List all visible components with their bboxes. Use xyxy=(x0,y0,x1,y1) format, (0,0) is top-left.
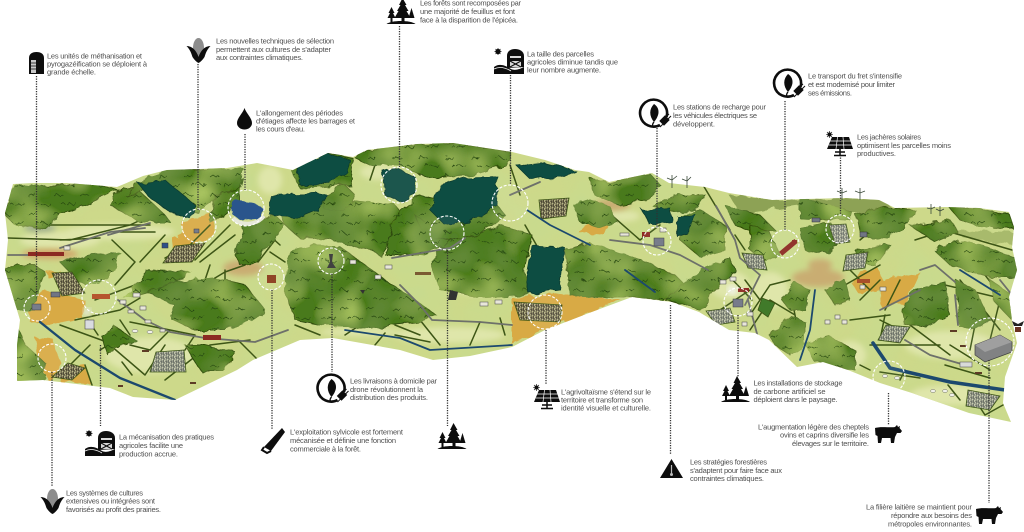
hedgerow network xyxy=(8,158,1012,415)
callout: mécanisation xyxy=(85,345,214,458)
text: Les stations de recharge pour xyxy=(673,102,766,112)
text: Les unités de méthanisation et xyxy=(47,52,143,60)
text: de carbone artificiel se xyxy=(754,387,826,396)
text: extensives ou intégrées sont xyxy=(66,496,156,506)
text: grande échelle. xyxy=(47,68,96,76)
callout: fret xyxy=(774,70,902,230)
text: Les livraisons à domicile par xyxy=(350,376,438,386)
text: identité visuelle et culturelle. xyxy=(561,404,651,412)
callout: sylviculture xyxy=(262,290,404,454)
text xyxy=(350,376,438,402)
rivers xyxy=(40,210,1005,400)
text xyxy=(256,108,356,134)
text: agricoles diminue tandis que xyxy=(527,58,618,66)
text: production accrue. xyxy=(119,450,178,458)
callout: drones xyxy=(318,274,438,402)
callout: cheptels xyxy=(758,393,902,448)
text: une majorité de feuillus et font xyxy=(420,7,516,16)
icon: leaf plug xyxy=(774,70,805,97)
tan parcels xyxy=(24,214,920,385)
callout: méthanisation xyxy=(29,52,148,295)
olive distant hills xyxy=(729,195,1014,245)
text: Le transport du fret s'intensifie xyxy=(808,72,902,80)
text: favorisés au profit des prairies. xyxy=(66,505,161,514)
text xyxy=(758,422,869,448)
text: s'adaptent pour faire face aux xyxy=(690,466,782,475)
text xyxy=(690,458,782,483)
callout: parcelles xyxy=(494,48,618,185)
landscape map xyxy=(0,140,1024,440)
text xyxy=(290,428,404,454)
text: permettent aux cultures de s'adapter xyxy=(216,45,332,54)
callout: forêts recomposées xyxy=(386,0,522,167)
text: L'allongement des périodes xyxy=(256,108,343,118)
text xyxy=(866,502,972,528)
lighter meadows xyxy=(20,164,995,405)
text: Les stratégies forestières xyxy=(690,458,767,466)
icon: cow xyxy=(976,506,1003,524)
text: commerciale à la forêt. xyxy=(290,444,361,454)
roads xyxy=(8,182,1012,365)
text: territoire et transforme son xyxy=(561,396,643,404)
teal conifer stands xyxy=(138,154,695,294)
icon: solar panel xyxy=(826,131,853,156)
callout: agrivoltaïsme xyxy=(533,330,651,412)
callout: jachères solaires xyxy=(826,131,951,215)
text: La taille des parcelles xyxy=(527,50,594,58)
text xyxy=(857,132,951,158)
text: d'étiages affecte les barrages et xyxy=(256,116,356,126)
dashed focus rings xyxy=(24,167,1014,393)
callout: étiages xyxy=(237,108,356,190)
callout: sélection xyxy=(186,36,334,210)
text: et est modernisé pour limiter xyxy=(808,80,896,89)
text: leur nombre augmente. xyxy=(527,66,601,74)
text xyxy=(754,378,842,404)
text: les véhicules électriques se xyxy=(673,111,757,120)
icon: trees xyxy=(438,423,466,449)
text: ses émissions. xyxy=(808,88,852,98)
icon: solar panel xyxy=(533,384,560,408)
forest ink squiggles xyxy=(5,143,1017,383)
grazing animals xyxy=(118,330,982,387)
text: répondre aux besoins des xyxy=(891,511,972,520)
icon: corn xyxy=(186,38,210,63)
base fields xyxy=(0,140,1024,440)
text: Les installations de stockage xyxy=(754,378,842,388)
icon: cow xyxy=(875,425,902,443)
text: les cours d'eau. xyxy=(256,124,305,134)
vineyards and solar fields xyxy=(52,198,1000,410)
icon: trees xyxy=(386,0,416,24)
text: mécanisée et définie une fonction xyxy=(290,436,396,445)
callout: stations de recharge xyxy=(640,100,766,227)
text: Les nouvelles techniques de sélection xyxy=(216,36,334,46)
text: distribution des produits. xyxy=(350,393,428,402)
text xyxy=(420,0,522,24)
wind turbines xyxy=(667,175,944,216)
icon: corn xyxy=(40,489,64,514)
text xyxy=(119,432,214,458)
text: drone révolutionnent la xyxy=(350,385,424,394)
callout: stratégies forestières xyxy=(660,305,782,483)
text: agricoles facilite une xyxy=(119,441,183,450)
text: ovins et caprins diversifie les xyxy=(780,430,869,440)
text: Les systèmes de cultures xyxy=(66,488,143,498)
icon: barn xyxy=(85,430,115,456)
text: déploient dans le paysage. xyxy=(754,395,838,404)
text xyxy=(561,388,651,412)
text xyxy=(673,102,766,128)
text: L'augmentation légère des cheptels xyxy=(758,422,869,432)
text: La mécanisation des pratiques xyxy=(119,432,214,442)
callout: stockage carbone xyxy=(721,315,842,404)
icon: trees xyxy=(721,376,750,402)
icon: leaf plug xyxy=(640,100,671,127)
text: contraintes climatiques. xyxy=(690,474,764,483)
icon: saw xyxy=(262,428,285,453)
forest masses xyxy=(5,143,1017,383)
callout: forest icon only xyxy=(438,250,466,449)
icon: leaf plug xyxy=(318,375,348,402)
text xyxy=(47,52,148,76)
buildings and machines xyxy=(28,218,1012,367)
text: métropoles environnantes. xyxy=(888,520,972,528)
text: élevages sur le territoire. xyxy=(792,439,869,448)
callout: filière laitière xyxy=(866,360,1003,528)
text xyxy=(808,72,902,98)
icon: silo xyxy=(29,52,44,74)
text: développent. xyxy=(673,120,715,128)
text: productives. xyxy=(857,149,896,158)
text: optimisent les parcelles moins xyxy=(857,141,951,150)
factory xyxy=(975,335,1012,362)
text xyxy=(216,36,334,62)
icon: thermometer warning xyxy=(660,459,683,478)
text: L'exploitation sylvicole est fortement xyxy=(290,428,404,436)
text: face à la disparition de l'épicéa. xyxy=(420,16,518,24)
icon: barn xyxy=(494,48,524,74)
text xyxy=(66,488,161,514)
text: pyrogazéification se déploient à xyxy=(47,60,148,68)
icon: water drop xyxy=(237,108,252,130)
callout: cultures extensives xyxy=(40,372,161,514)
text: La filière laitière se maintient pour xyxy=(866,502,972,512)
text xyxy=(527,50,618,74)
text: L'agrivoltaïsme s'étend sur le xyxy=(561,388,651,396)
text: aux contraintes climatiques. xyxy=(216,53,303,62)
reservoir xyxy=(232,200,263,220)
drone over factory xyxy=(1012,321,1024,332)
text: Les jachères solaires xyxy=(857,132,921,142)
